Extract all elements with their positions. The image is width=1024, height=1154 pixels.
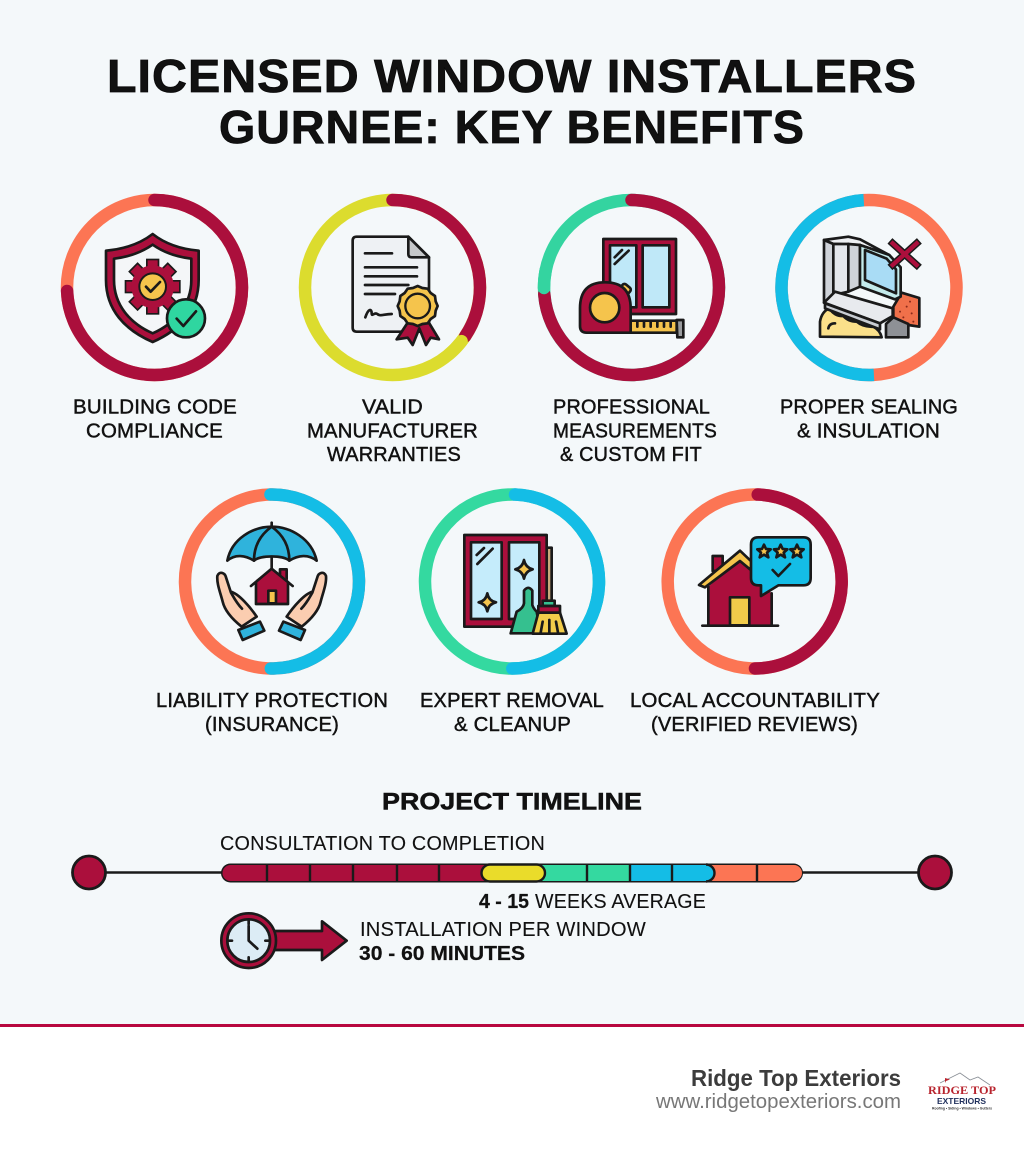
panel: building code compliance — [67, 200, 242, 442]
website: www.ridgetopexteriors.com — [655, 1091, 901, 1113]
progress ring — [665, 492, 845, 671]
logo: EXTERIORS — [937, 1096, 986, 1106]
label: PROFESSIONAL — [553, 396, 710, 418]
icon: shield with gear and check — [106, 234, 205, 342]
installation caption: 30 - 60 MINUTES — [359, 943, 525, 965]
progress ring — [183, 493, 361, 670]
label: BUILDING CODE — [73, 396, 237, 418]
timeline heading: PROJECT TIMELINE — [382, 788, 642, 816]
logo: Roofing • Siding • Windows • Gutters — [932, 1106, 992, 1110]
installation caption — [359, 919, 646, 965]
label — [630, 690, 880, 736]
label — [420, 690, 604, 736]
panel: valid manufacturer warranties — [305, 200, 480, 466]
label: (INSURANCE) — [205, 714, 339, 736]
label: MANUFACTURER — [307, 420, 478, 442]
panel: expert removal and cleanup — [420, 492, 604, 736]
duration caption: WEEKS AVERAGE — [535, 891, 706, 913]
progress ring — [777, 196, 961, 379]
progress ring — [305, 200, 480, 375]
icon: umbrella over house with hands — [217, 523, 326, 640]
label — [553, 396, 717, 466]
label: LIABILITY PROTECTION — [156, 690, 388, 712]
label — [307, 396, 478, 466]
label — [780, 396, 958, 442]
timeline track with end markers — [72, 856, 952, 889]
logo: RIDGE TOP — [928, 1083, 996, 1097]
label — [73, 396, 237, 442]
panel: professional measurements — [544, 200, 719, 466]
label: MEASUREMENTS — [553, 420, 717, 442]
label: (VERIFIED REVIEWS) — [651, 714, 858, 736]
label — [156, 690, 388, 736]
icon: window cross-section with insulation — [820, 237, 919, 337]
label: EXPERT REMOVAL — [420, 690, 604, 712]
panel: liability protection — [156, 493, 388, 736]
label: WARRANTIES — [327, 444, 461, 466]
icon: window and tape measure — [580, 239, 683, 337]
duration caption: 4 - 15 — [479, 891, 529, 913]
company name: Ridge Top Exteriors — [691, 1065, 901, 1091]
consultation caption: CONSULTATION TO COMPLETION — [220, 833, 545, 855]
progress ring — [422, 492, 602, 671]
label: & CUSTOM FIT — [560, 444, 702, 466]
label: PROPER SEALING — [780, 396, 958, 418]
label: COMPLIANCE — [86, 420, 223, 442]
progress ring — [67, 200, 242, 375]
label: VALID — [362, 396, 423, 418]
icon: clean window with broom and dustpan — [464, 535, 567, 634]
logo — [928, 1073, 996, 1110]
segmented progress bar — [221, 864, 803, 882]
title — [107, 50, 917, 153]
icon: warranty document with seal — [353, 237, 439, 345]
panel: proper sealing and insulation — [777, 196, 961, 442]
panel: local accountability — [630, 492, 880, 736]
title: GURNEE: KEY BENEFITS — [219, 101, 805, 153]
icon: clock with arrow — [221, 913, 347, 968]
progress ring — [544, 200, 719, 375]
installation caption: INSTALLATION PER WINDOW — [360, 919, 646, 941]
label: & CLEANUP — [454, 714, 571, 736]
label: LOCAL ACCOUNTABILITY — [630, 690, 880, 712]
title: LICENSED WINDOW INSTALLERS — [107, 50, 917, 102]
footer band — [0, 1024, 1024, 1154]
icon: house with review speech bubble — [699, 537, 811, 626]
panel: project timeline — [72, 788, 952, 968]
label: & INSULATION — [797, 420, 940, 442]
